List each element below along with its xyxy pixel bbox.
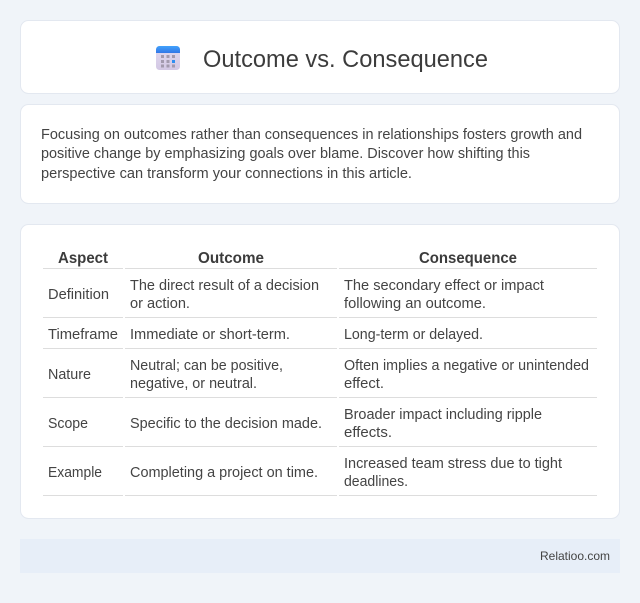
icon: calendar (156, 46, 180, 70)
row: example: Example (48, 465, 102, 481)
row: example: Completing a project on time. (130, 465, 318, 481)
row: example: deadlines. (344, 474, 408, 490)
row: nature: effect. (344, 376, 384, 392)
row: timeframe: Immediate or short-term. (130, 327, 290, 343)
row: definition: or action. (130, 296, 190, 312)
row: scope: Scope (48, 416, 88, 432)
row: scope: effects. (344, 425, 392, 441)
title: Outcome vs. Consequence (203, 46, 488, 73)
intro text: Focusing on outcomes rather than consequences in relationships fosters growth and (41, 127, 582, 143)
row: definition: The secondary effect or impact (344, 278, 544, 294)
table header row (58, 250, 517, 267)
row: nature (48, 358, 589, 392)
row: nature: Nature (48, 367, 91, 383)
intro text (41, 127, 582, 182)
row: example: Increased team stress due to tight (344, 456, 562, 472)
table panel (20, 224, 620, 518)
row: nature: Neutral; can be positive, (130, 358, 283, 374)
intro text: positive change by emphasizing goals over blame. Discover how shifting this (41, 146, 530, 162)
row: timeframe: Timeframe (48, 327, 118, 343)
footer bar (20, 539, 620, 573)
row: nature: negative, or neutral. (130, 376, 257, 392)
footer text: Relatioo.com (540, 549, 610, 563)
row: definition: The direct result of a decision (130, 278, 319, 294)
row: scope: Broader impact including ripple (344, 407, 542, 423)
row: example (48, 456, 562, 490)
row: scope: Specific to the decision made. (130, 416, 322, 432)
row: nature: Often implies a negative or unintended (344, 358, 589, 374)
row: definition (48, 278, 544, 312)
table header row: Outcome (198, 250, 264, 267)
row: timeframe (48, 327, 483, 343)
table header row: Consequence (419, 250, 517, 267)
row: definition: following an outcome. (344, 296, 486, 312)
row: timeframe: Long-term or delayed. (344, 327, 483, 343)
row: scope (48, 407, 542, 441)
header panel (20, 20, 620, 94)
intro panel (20, 104, 620, 204)
row: definition: Definition (48, 287, 109, 303)
intro text: perspective can transform your connections in this article. (41, 166, 412, 182)
table header row: Aspect (58, 250, 108, 267)
